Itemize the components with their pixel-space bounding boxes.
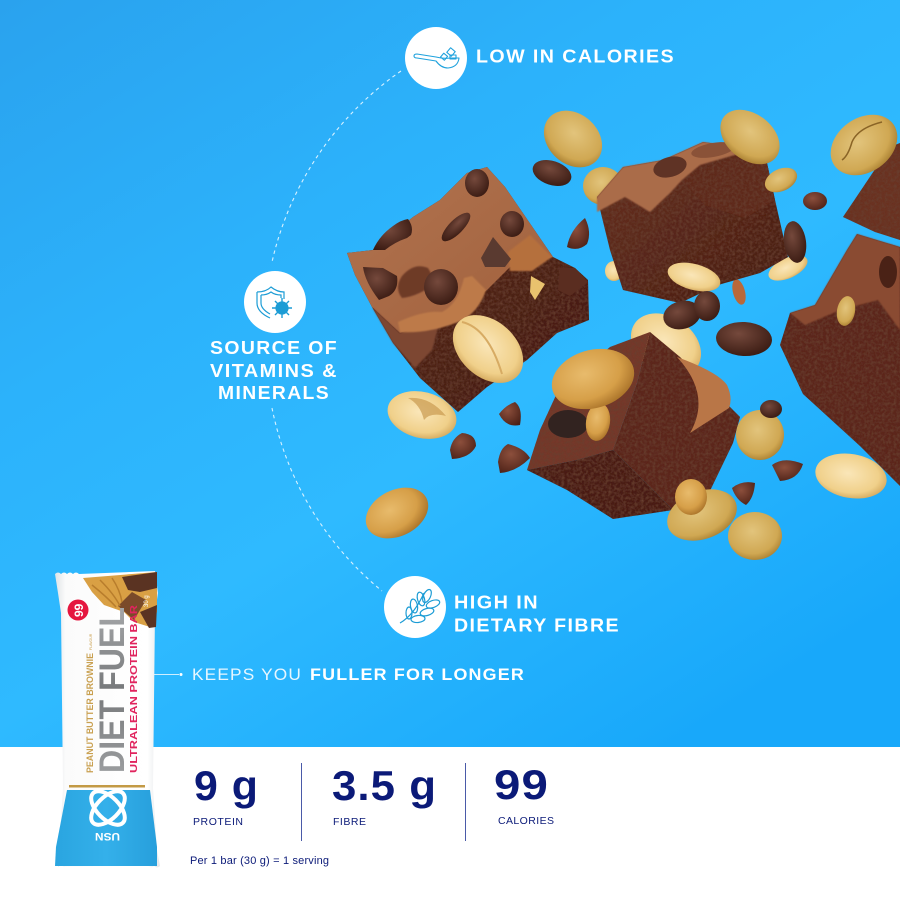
stat: protein: PROTEIN [193,816,243,828]
blue base with logo [55,790,157,866]
food photo: brownies and peanuts [347,99,900,560]
heading: source of vitamins and minerals [210,338,338,403]
brownie: top left with chocolate chips [347,167,589,412]
icon: shield with virus [257,287,292,318]
white nutrition band [0,747,900,900]
gold band [69,785,145,788]
heading: high in dietary fibre: DIETARY FIBRE [454,616,620,636]
heading: high in dietary fibre [454,592,620,636]
brownie: bottom centre with caramel [527,332,740,519]
stat: fibre [332,762,437,828]
stat dividers [302,763,466,841]
wordmark: USN [95,830,120,842]
heading: low in calories: LOW IN CALORIES [476,46,675,66]
stat: calories: 99 [494,761,549,808]
icon: wheat ear [400,588,441,623]
benefit: source of vitamins and minerals [210,271,338,403]
stat: protein: 9 g [194,762,259,809]
heading: source of vitamins and minerals: VITAMINS & [210,361,338,381]
99 kcal badge [68,600,88,620]
chocolate chips and crumbs [450,155,827,505]
peanut: half on brownie [440,301,536,397]
icon: spoon with sugar cubes [414,48,459,68]
product: protein bar wrapper: 30 g [144,595,150,607]
stat: fibre: 3.5 g [332,762,437,809]
chips on brownie [465,169,489,197]
caramel drip [398,276,486,332]
dashed arc connector [272,71,401,591]
heading: source of vitamins and minerals: MINERALS [218,383,330,403]
loose peanuts [357,99,900,560]
flavour text: PEANUT BUTTER BROWNIE [85,653,95,773]
peanuts behind brownies [583,167,811,390]
benefit: low in calories [405,27,675,89]
stats row [193,761,554,828]
heading: source of vitamins and minerals: SOURCE OF [210,338,338,358]
heading: high in dietary fibre: HIGH IN [454,592,539,612]
benefit: high in dietary fibre [384,576,620,638]
callout: keeps you fuller for longer [150,666,525,684]
serving note: Per 1 bar (30 g) = 1 serving [190,855,329,867]
peanut butter photo on wrapper [83,572,157,627]
product: protein bar wrapper: FLAVOUR [89,633,93,650]
stat: protein [193,762,259,828]
stat: calories [494,761,554,827]
product: protein bar wrapper [55,571,160,868]
brownie: top centre [597,139,809,333]
callout: keeps you fuller for longer: KEEPS YOU [192,666,302,684]
99 kcal badge: 99 [72,603,86,617]
brownies: right edge [780,143,900,486]
callout: keeps you fuller for longer: FULLER FOR LONGER [310,666,525,684]
stat: calories: CALORIES [498,815,554,827]
product descriptor: ULTRALEAN PROTEIN BAR [128,605,140,773]
USN logo [85,785,131,831]
brand name: DIET FUEL [93,607,132,773]
stat: fibre: FIBRE [333,816,366,828]
